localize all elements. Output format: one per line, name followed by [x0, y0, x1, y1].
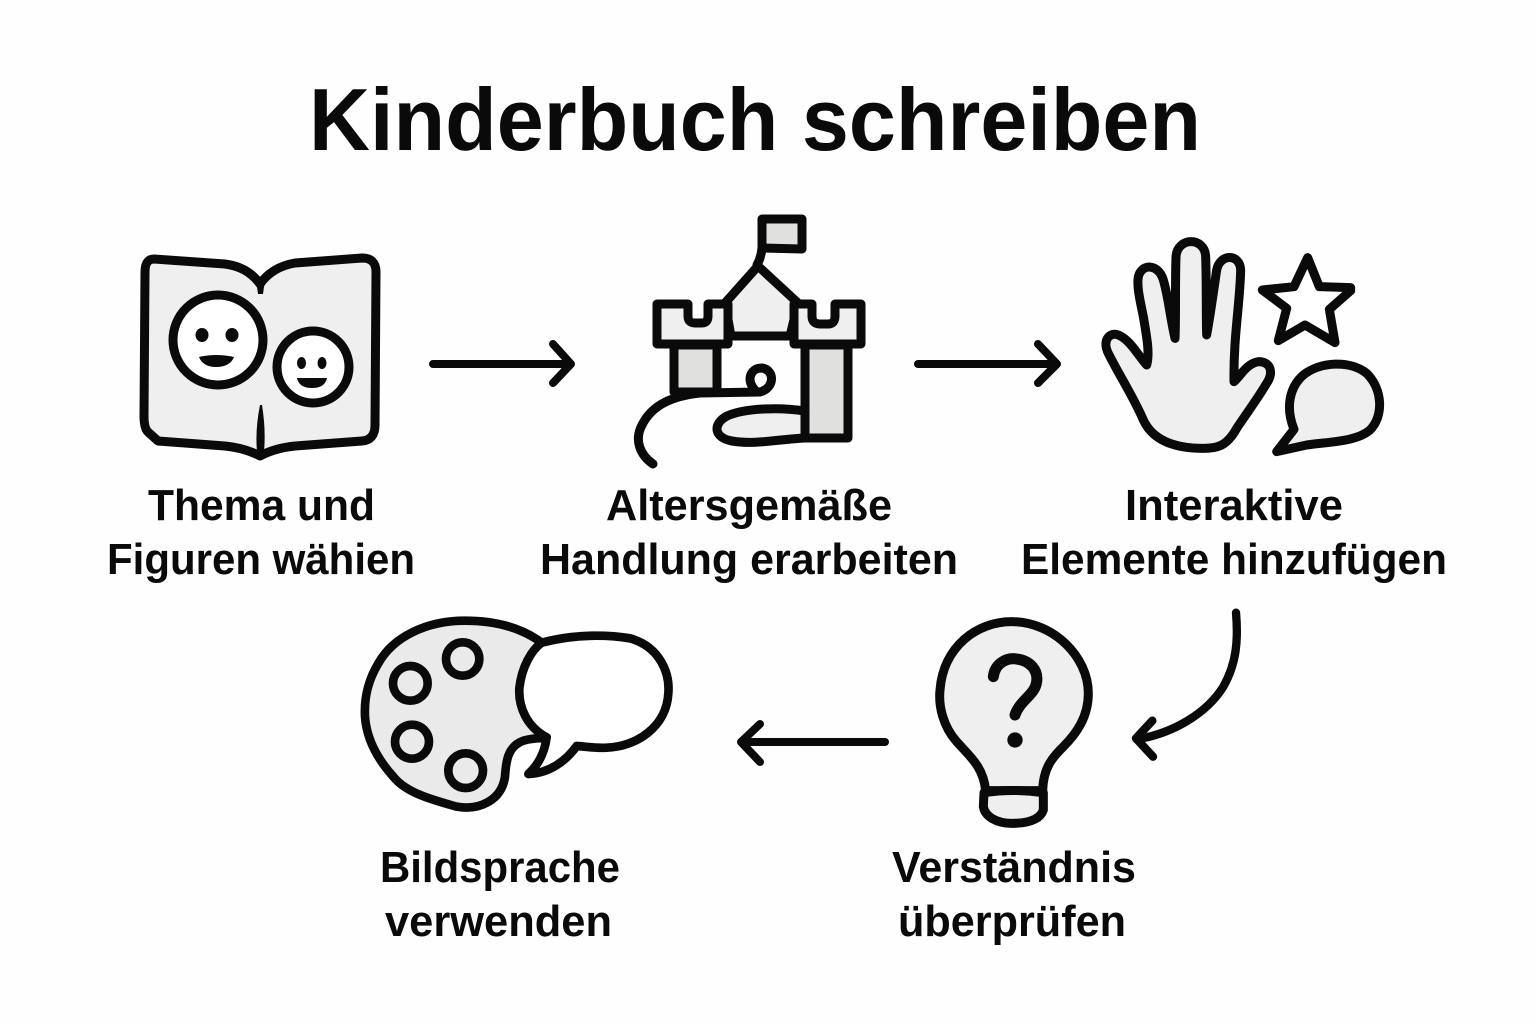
label: Thema und Figuren wählen: Figuren wähien — [107, 535, 415, 584]
label: Verständnis überprüfen: überprüfen — [898, 897, 1126, 946]
label: Interaktive Elemente hinzufügen — [1021, 481, 1447, 584]
label: Interaktive Elemente hinzufügen: Elemente hinzufügen — [1021, 535, 1447, 584]
arrow: step 3 to 4, curved — [1136, 613, 1237, 757]
label: Thema und Figuren wählen — [107, 481, 415, 584]
label: Bildsprache verwenden: verwenden — [385, 897, 612, 946]
label: Altersgemäße Handlung erarbeiten — [540, 481, 958, 584]
label: Verständnis überprüfen — [892, 843, 1136, 946]
icon: light bulb with question mark — [940, 622, 1088, 823]
label: Bildsprache verwenden — [380, 843, 620, 946]
arrow: step 2 to 3 — [918, 344, 1057, 383]
icon: paint palette with speech bubble — [365, 621, 669, 807]
arrow: step 1 to 2 — [433, 344, 571, 383]
label: Altersgemäße Handlung erarbeiten: Altersgemäße — [606, 481, 892, 530]
label: Interaktive Elemente hinzufügen: Interaktive — [1125, 481, 1343, 530]
title: Kinderbuch schreiben — [309, 70, 1201, 169]
label: Altersgemäße Handlung erarbeiten: Handlung erarbeiten — [540, 535, 958, 584]
label: Thema und Figuren wählen: Thema und — [148, 481, 375, 530]
icon: hand, star and speech bubble — [1106, 242, 1380, 452]
icon: castle with flag and path — [638, 219, 861, 464]
label: Verständnis überprüfen: Verständnis — [892, 843, 1136, 892]
icon: open book with two faces — [144, 258, 376, 456]
label: Bildsprache verwenden: Bildsprache — [380, 843, 620, 892]
arrow: step 4 to 5 — [741, 724, 885, 762]
